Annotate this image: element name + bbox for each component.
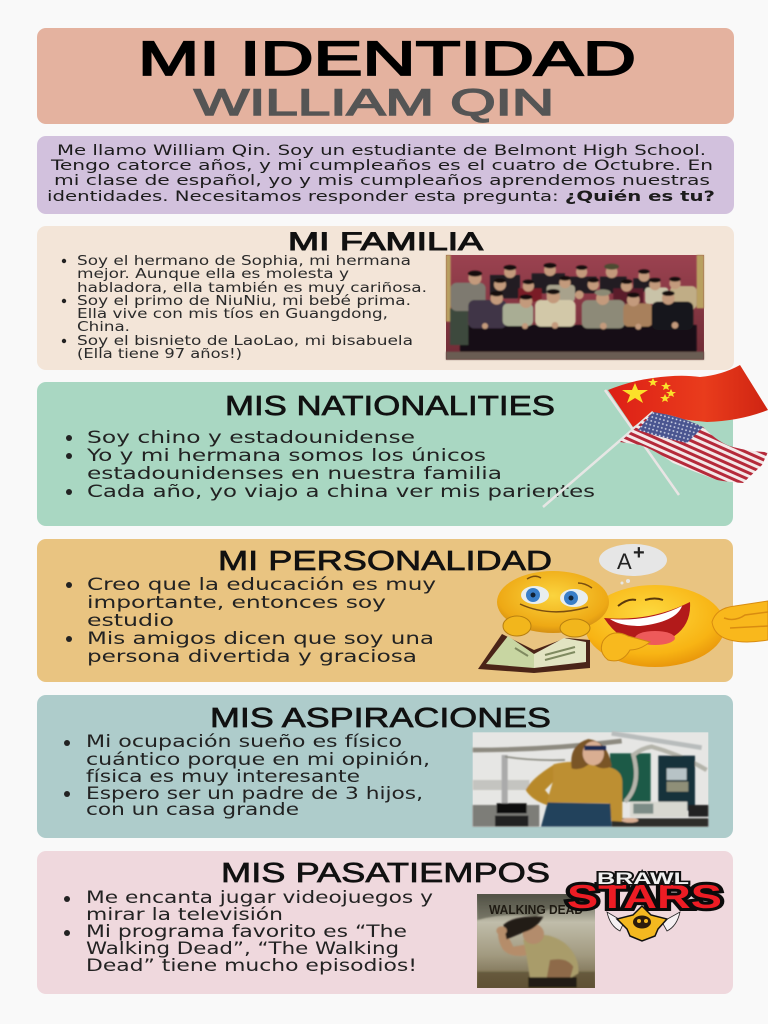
heading: mis aspiraciones: MIS ASPIRACIONES (210, 702, 551, 733)
family bullet list: Soy el bisnieto de LaoLao, mi bisabuela (77, 334, 413, 349)
panel: mis nationalities (37, 365, 768, 526)
hobbies bullet list: mirar la televisión (86, 905, 283, 924)
hobbies bullet list: Me encanta jugar videojuegos y (86, 888, 433, 907)
family bullet list: Soy el hermano de Sophia, mi hermana (77, 254, 411, 269)
aspirations bullet list: Mi ocupación sueño es físico (86, 732, 402, 751)
icon: reading emoji with book (478, 571, 609, 673)
family bullet list: China. (77, 320, 130, 335)
family bullet list: mejor. Aunque ella es molesta y (77, 267, 349, 282)
hobbies bullet list: Dead” tiene mucho episodios! (86, 956, 417, 975)
panel: mis aspiraciones (37, 695, 733, 838)
nationalities bullet list (66, 428, 595, 501)
panel: mi familia (37, 226, 734, 370)
aspirations bullet list (64, 732, 430, 819)
icon: A+ speech bubble (599, 542, 667, 584)
nationalities bullet list: Cada año, yo viajo a china ver mis parientes (87, 482, 595, 501)
family bullet list (62, 254, 427, 362)
family bullet list: Soy el primo de NiuNiu, mi bebé prima. (77, 294, 411, 309)
personality bullet list: persona divertida y graciosa (87, 647, 417, 666)
subtitle: WILLIAM QIN (194, 82, 554, 123)
icon: A+ speech bubble: + (633, 542, 645, 564)
heading: mi personalidad: MI PERSONALIDAD (218, 545, 552, 576)
icon: A+ speech bubble: A (617, 549, 632, 574)
nationalities bullet list: Yo y mi hermana somos los únicos (86, 446, 486, 465)
aspirations bullet list: con un casa grande (86, 800, 299, 819)
icon: Brawl Stars logo: STARS (567, 878, 722, 915)
family bullet list: habladora, ella también es muy cariñosa. (77, 281, 427, 296)
hobbies bullet list: Mi programa favorito es “The (86, 922, 407, 941)
personality bullet list: Mis amigos dicen que soy una (87, 629, 434, 648)
hobbies bullet list: Walking Dead”, “The Walking (86, 939, 399, 958)
icon: crossed flags of China and USA (543, 365, 768, 507)
aspirations bullet list: física es muy interesante (86, 767, 360, 786)
icon: Brawl Stars logo (567, 869, 722, 941)
family bullet list: (Ella tiene 97 años!) (77, 347, 242, 362)
image: physicist in laboratory (473, 732, 708, 827)
heading: mis pasatiempos: MIS PASATIEMPOS (221, 857, 550, 888)
intro text: mi clase de español, yo y mis cumpleaños aprendemos nuestras (54, 173, 710, 189)
intro text: identidades. Necesitamos responder esta pregunta: ¿Quién es tu? (47, 189, 715, 205)
intro text (47, 143, 715, 205)
nationalities bullet list: Soy chino y estadounidense (87, 428, 415, 447)
image: family photo (446, 255, 704, 360)
image: The Walking Dead poster (477, 894, 595, 988)
panel: introduction (37, 136, 734, 214)
family bullet list: Ella vive con mis tíos en Guangdong, (77, 307, 388, 322)
panel: mis pasatiempos (37, 851, 733, 994)
intro text: Tengo catorce años, y mi cumpleaños es el cuatro de Octubre. En (50, 158, 713, 174)
aspirations bullet list: Espero ser un padre de 3 hijos, (86, 784, 423, 803)
personality bullet list: estudio (87, 611, 174, 630)
heading: mis nationalities: MIS NATIONALITIES (225, 390, 555, 421)
aspirations bullet list: cuántico porque en mi opinión, (86, 750, 430, 769)
icon: Brawl Stars logo: BRAWL (597, 869, 689, 888)
personality bullet list: Creo que la educación es muy (87, 575, 436, 594)
seated row (468, 300, 507, 328)
title: MI IDENTIDAD (138, 33, 636, 86)
heads (468, 264, 681, 308)
intro text: Me llamo William Qin. Soy un estudiante de Belmont High School. (57, 143, 706, 159)
hands (482, 322, 678, 330)
personality bullet list (66, 575, 436, 666)
image: The Walking Dead poster: WALKING DEAD (489, 902, 583, 917)
heading: mi familia: MI FAMILIA (288, 228, 483, 256)
icon: laughing emoji pointing (585, 585, 768, 667)
panel: mi personalidad (37, 539, 768, 682)
nationalities bullet list: estadounidenses en nuestra familia (87, 464, 502, 483)
panel: title (37, 28, 734, 124)
hobbies bullet list (64, 888, 433, 975)
person (526, 765, 555, 805)
personality bullet list: importante, entonces soy (87, 593, 386, 612)
back row (490, 273, 660, 298)
